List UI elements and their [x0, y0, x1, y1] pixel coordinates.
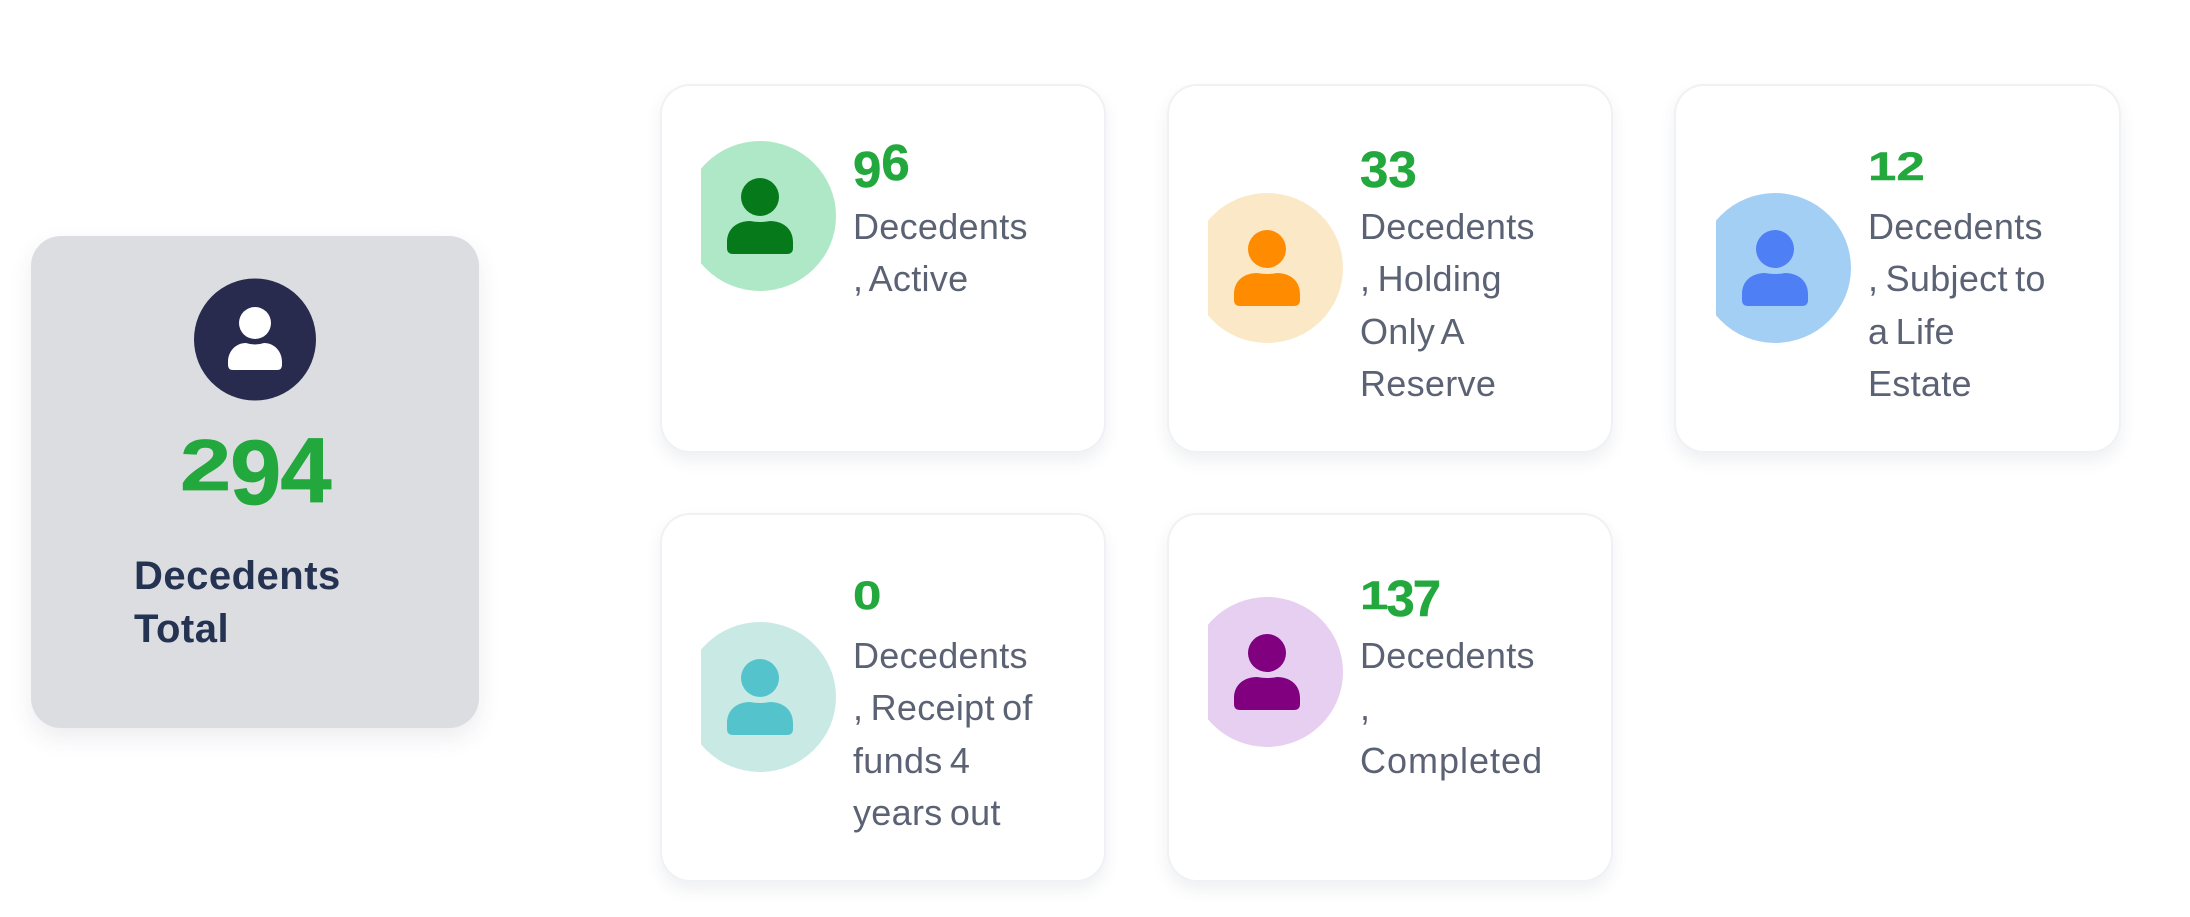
value: 137: 3 [1386, 570, 1413, 627]
icon: life estate person [1716, 193, 1851, 343]
label: subject to a life estate: a Life [1868, 311, 1955, 352]
value: 137 [1360, 570, 1440, 627]
icon: total person [194, 278, 316, 400]
value: 33 [1360, 141, 1417, 198]
label: active [853, 206, 1028, 299]
icon: active person [701, 141, 836, 291]
label: receipt of funds: years out [853, 792, 1001, 833]
label: completed: Completed [1360, 740, 1543, 781]
value: 0: 0 [853, 573, 881, 618]
label: holding only a reserve: Decedents [1360, 206, 1535, 247]
total value [180, 420, 332, 524]
label: receipt of funds: Decedents [853, 635, 1028, 676]
label: completed: , [1360, 687, 1370, 728]
label: subject to a life estate: Decedents [1868, 206, 2043, 247]
value: 96 [853, 134, 910, 198]
value: 12 [1868, 144, 1925, 189]
icon: receipt person [701, 622, 836, 772]
label: holding only a reserve [1360, 206, 1535, 404]
total value: 9 [230, 422, 280, 524]
value: 96: 9 [853, 141, 881, 198]
total value: 4 [280, 420, 331, 522]
panel: active [660, 84, 1106, 453]
label: subject to a life estate [1868, 206, 2046, 404]
panel: decedents total [31, 236, 479, 728]
icon: completed person [1208, 597, 1343, 747]
label: active: , Active [853, 258, 968, 299]
panel: completed [1167, 513, 1613, 882]
value: 96: 6 [881, 134, 910, 191]
label: subject to a life estate: , Subject to [1868, 258, 2046, 299]
value: 137: 7 [1413, 570, 1439, 627]
panel: receipt of funds [660, 513, 1106, 882]
label: receipt of funds [853, 635, 1033, 833]
label: receipt of funds: funds 4 [853, 740, 970, 781]
value: 33: 3 [1360, 141, 1388, 198]
label: completed: Decedents [1360, 635, 1535, 676]
panel: holding only a reserve [1167, 84, 1613, 453]
value: 33: 3 [1388, 141, 1417, 198]
total label [134, 554, 341, 651]
value: 12: 2 [1896, 144, 1925, 189]
label: holding only a reserve: Only A [1360, 311, 1465, 352]
label: receipt of funds: , Receipt of [853, 687, 1033, 728]
value: 137: 1 [1360, 573, 1386, 618]
icon: reserve person [1208, 193, 1343, 343]
label: active: Decedents [853, 206, 1028, 247]
label: holding only a reserve: Reserve [1360, 363, 1496, 404]
label: subject to a life estate: Estate [1868, 363, 1972, 404]
panel: subject to a life estate [1674, 84, 2121, 453]
total label: Total [134, 607, 229, 651]
total value: 2 [180, 425, 230, 506]
value: 12: 1 [1868, 144, 1896, 189]
total label: Decedents [134, 554, 341, 598]
label: holding only a reserve: , Holding [1360, 258, 1502, 299]
label: completed [1360, 635, 1543, 781]
